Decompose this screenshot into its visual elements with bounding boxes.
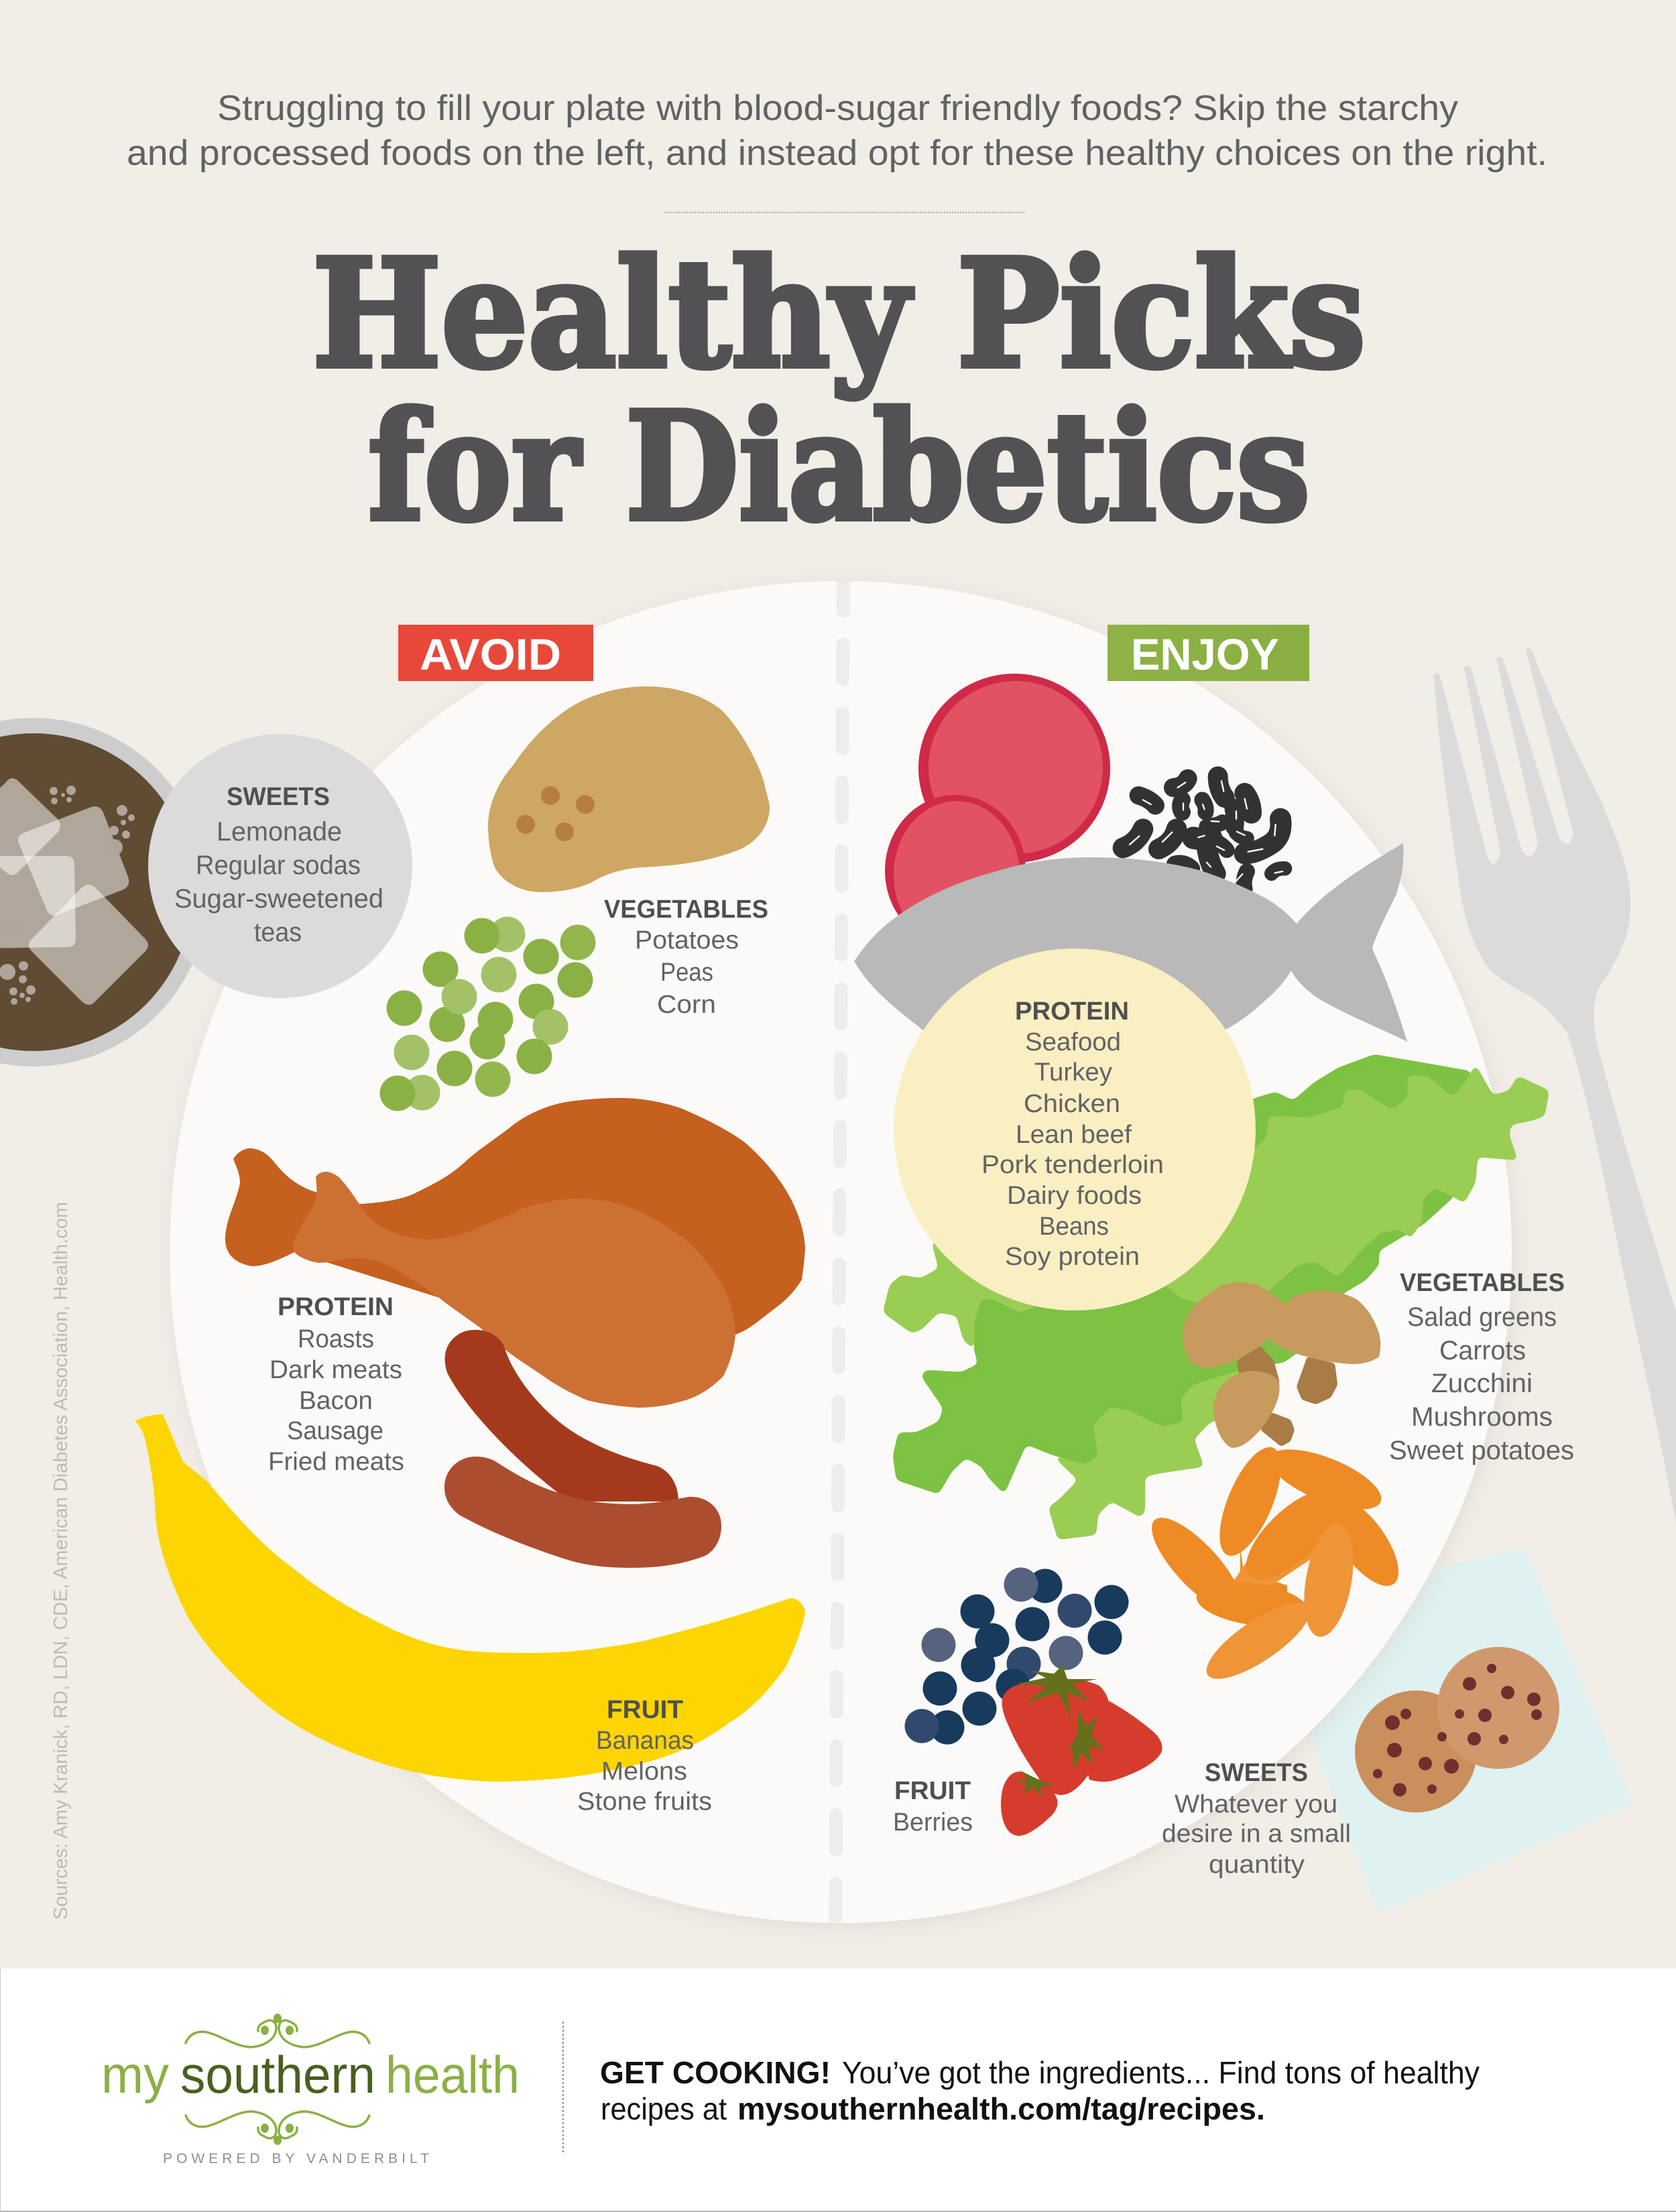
sweets circle: teas (254, 918, 302, 947)
icon: peas (379, 917, 595, 1111)
logo: my southern health (101, 2014, 520, 2166)
call to action: recipes at (601, 2091, 727, 2126)
label: enjoy sweets: quantity (1209, 1851, 1305, 1879)
intro text: and processed foods on the left, and instead opt for these healthy choices on the right. (127, 133, 1547, 173)
icon: potato (488, 686, 770, 892)
sweets circle: Lemonade (217, 817, 342, 847)
label: avoid vegetables: Corn (657, 991, 716, 1019)
label: avoid protein: PROTEIN (278, 1293, 394, 1321)
icon: soda glass (0, 718, 208, 1066)
icon: sausages (444, 1330, 721, 1568)
sweets circle (148, 734, 412, 998)
protein circle: Soy protein (1005, 1243, 1140, 1271)
label: avoid vegetables: VEGETABLES (604, 896, 768, 924)
icon: deli meat slices (885, 674, 1110, 948)
label: avoid protein: Roasts (298, 1325, 374, 1353)
sweets circle: Regular sodas (196, 851, 361, 880)
call to action: You’ve got the ingredients... Find tons of healthy (842, 2055, 1480, 2090)
icon: black beans (1123, 776, 1285, 889)
intro text: Struggling to fill your plate with blood-sugar friendly foods? Skip the starchy (217, 88, 1459, 128)
call to action (600, 2055, 1480, 2126)
logo: my southern health: southern (180, 2045, 375, 2104)
label: avoid protein: Fried meats (268, 1448, 404, 1476)
intro text (127, 88, 1547, 173)
icon: strawberries (1001, 1665, 1162, 1836)
label: avoid vegetables: Peas (660, 959, 713, 987)
label: enjoy vegetables: Zucchini (1431, 1369, 1533, 1398)
icon: chicken drumsticks (225, 1098, 805, 1408)
logo: my southern health: health (385, 2045, 520, 2104)
icon: mushrooms (1183, 1282, 1380, 1448)
label: avoid fruit: FRUIT (607, 1696, 683, 1724)
label: enjoy sweets (1162, 1759, 1351, 1879)
label: avoid fruit: Stone fruits (577, 1788, 712, 1816)
label: enjoy vegetables: Mushrooms (1411, 1402, 1553, 1432)
sweets circle: Sugar-sweetened (174, 884, 383, 914)
protein circle: Chicken (1024, 1090, 1120, 1118)
protein circle: Beans (1039, 1213, 1109, 1241)
avoid badge: AVOID (420, 629, 561, 679)
label: enjoy vegetables: Sweet potatoes (1389, 1436, 1574, 1465)
call to action: GET COOKING! (600, 2055, 831, 2090)
footer panel (0, 1969, 1676, 2212)
title (312, 227, 1366, 554)
label: avoid vegetables (604, 896, 768, 1019)
protein circle: Turkey (1034, 1058, 1112, 1087)
label: enjoy vegetables (1389, 1269, 1574, 1465)
label: enjoy fruit: FRUIT (894, 1777, 971, 1805)
icon: fork (1434, 648, 1676, 1524)
icon: cookies (1355, 1647, 1559, 1812)
plate (170, 576, 1514, 1937)
sweets circle: SWEETS (227, 783, 330, 811)
protein circle: Seafood (1025, 1028, 1121, 1056)
avoid badge (398, 625, 593, 681)
icon: blueberries (905, 1567, 1129, 1744)
protein circle: PROTEIN (1015, 997, 1129, 1026)
icon: banana (135, 1414, 805, 1782)
label: enjoy fruit: Berries (893, 1808, 973, 1837)
protein circle: Pork tenderloin (981, 1151, 1164, 1179)
label: avoid fruit: Melons (601, 1758, 687, 1786)
icon: fish (854, 843, 1407, 1086)
label: avoid protein: Dark meats (270, 1356, 402, 1384)
logo: my southern health: my (101, 2045, 169, 2104)
label: avoid fruit: Bananas (596, 1727, 694, 1755)
label: enjoy fruit (893, 1777, 973, 1837)
enjoy badge (1108, 625, 1309, 681)
title: Healthy Picks (312, 227, 1366, 402)
protein circle: Dairy foods (1007, 1182, 1142, 1210)
sources credit: Sources: Amy Kranick, RD, LDN, CDE, American Diabetes Association, Health.com (50, 1202, 72, 1920)
label: enjoy sweets: SWEETS (1205, 1759, 1308, 1787)
napkin (1260, 1548, 1632, 1912)
enjoy badge: ENJOY (1131, 629, 1279, 679)
label: enjoy sweets: Whatever you (1175, 1790, 1337, 1819)
label: enjoy vegetables: VEGETABLES (1400, 1269, 1565, 1297)
title: for Diabetics (368, 380, 1310, 554)
protein circle: Lean beef (1016, 1121, 1132, 1149)
logo: my southern health: POWERED BY VANDERBILT (163, 2151, 429, 2166)
icon: lettuce (883, 1054, 1549, 1540)
label: avoid fruit (577, 1696, 712, 1816)
label: enjoy sweets: desire in a small (1162, 1820, 1351, 1848)
label: avoid protein: Sausage (287, 1417, 383, 1445)
label: enjoy vegetables: Carrots (1439, 1336, 1526, 1365)
label: enjoy vegetables: Salad greens (1407, 1302, 1557, 1332)
label: avoid protein (268, 1293, 404, 1476)
call to action: mysouthernhealth.com/tag/recipes. (737, 2091, 1265, 2126)
icon: carrots (1139, 1437, 1412, 1692)
label: avoid vegetables: Potatoes (635, 926, 739, 955)
protein circle (894, 948, 1256, 1310)
label: avoid protein: Bacon (299, 1387, 373, 1415)
